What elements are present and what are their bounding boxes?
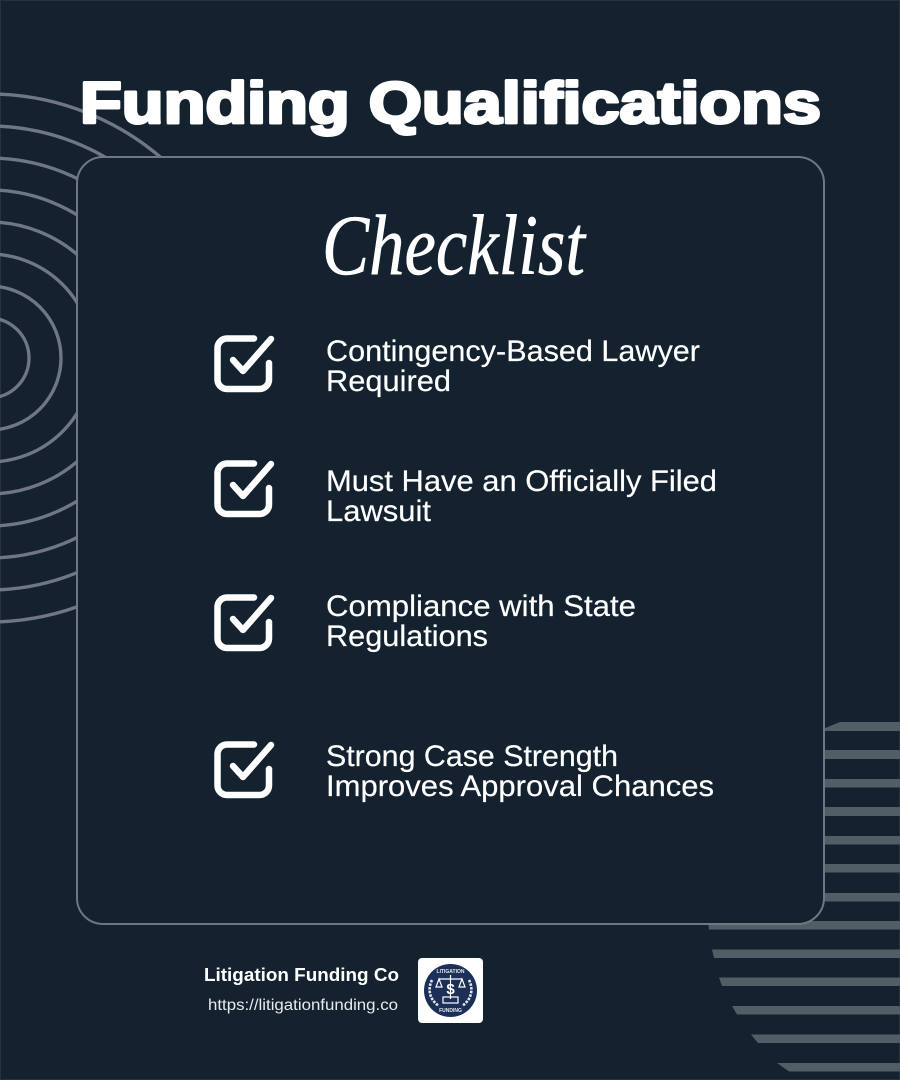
text: item 1: Required <box>326 365 451 398</box>
checklist item 1 <box>218 335 700 398</box>
text: item 3 <box>326 590 636 653</box>
text: item 2: Lawsuit <box>326 495 432 528</box>
checklist item 4 <box>218 740 714 803</box>
logo badge: $ <box>446 981 455 998</box>
decorative concentric arcs <box>0 94 253 622</box>
text: item 3: Regulations <box>326 620 488 653</box>
text: item 2: Must Have an Officially Filed <box>326 465 717 498</box>
panel: checklist card <box>77 157 824 924</box>
logo badge <box>418 958 483 1023</box>
checklist item 3 <box>218 590 636 653</box>
text: item 4: Strong Case Strength <box>326 740 618 773</box>
checklist item 2 <box>218 464 717 528</box>
title: Funding Qualifications <box>80 71 821 136</box>
icon: checkbox 1 <box>218 338 271 389</box>
icon: checkbox 3 <box>218 598 271 648</box>
logo badge: FUNDING <box>439 1008 462 1014</box>
icon: checkbox 4 <box>218 744 271 795</box>
footer url: https://litigationfunding.co <box>208 997 398 1014</box>
text: item 1 <box>326 335 700 398</box>
decorative stripes <box>708 722 900 1072</box>
text: item 1: Contingency-Based Lawyer <box>326 335 700 368</box>
text: item 4: Improves Approval Chances <box>326 770 714 803</box>
text: item 2 <box>326 465 717 528</box>
footer company name: Litigation Funding Co <box>204 965 399 985</box>
text: item 3: Compliance with State <box>326 590 636 623</box>
logo badge: LITIGATION <box>437 969 465 975</box>
heading: Checklist: Checklist <box>322 197 587 293</box>
text: item 4 <box>326 740 714 803</box>
icon: checkbox 2 <box>218 464 271 514</box>
